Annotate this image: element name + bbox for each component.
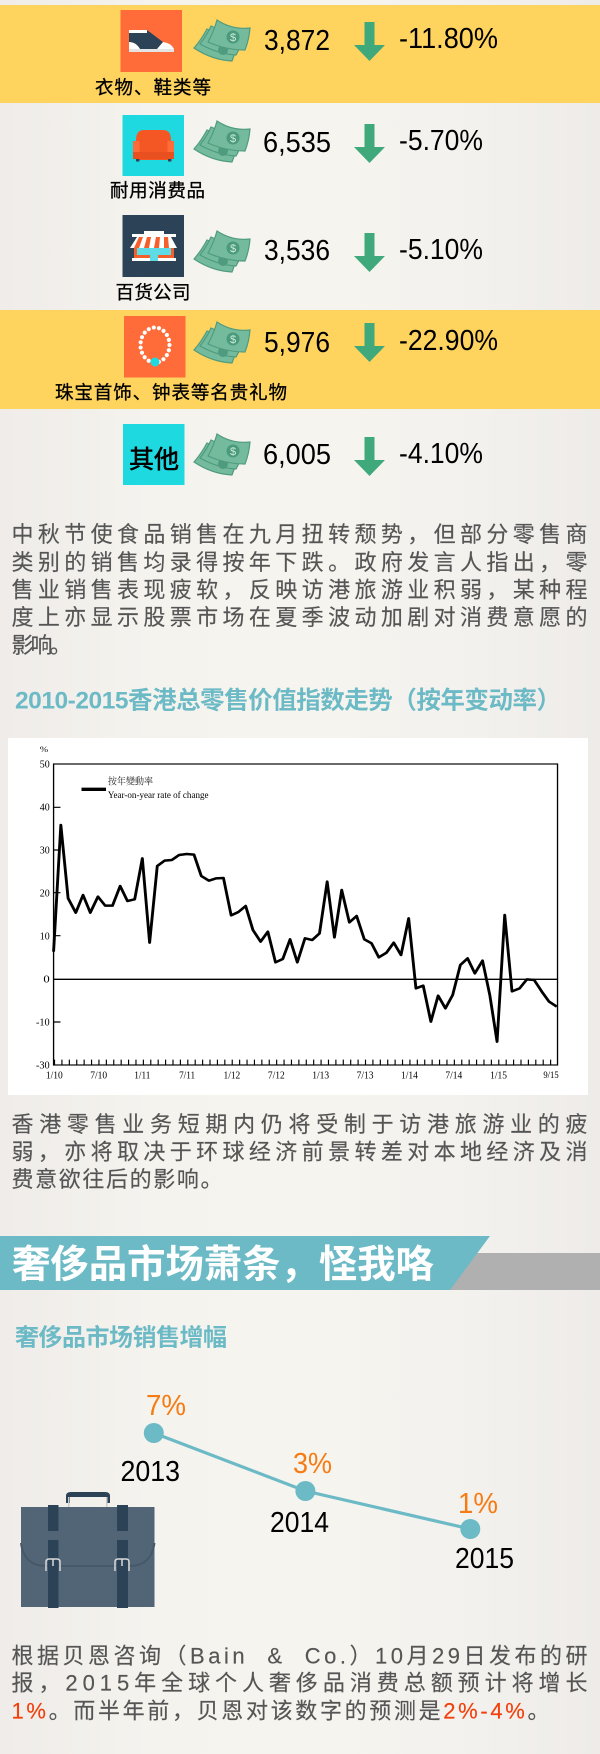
line chart: retail sales index year-on-year change: 7/10 — [90, 1068, 107, 1081]
yellow band — [0, 5, 600, 103]
value: 6,535 — [263, 127, 331, 159]
yellow band — [0, 310, 600, 409]
paragraph: retail commentary — [12, 522, 588, 658]
line chart: luxury market growth — [120, 1390, 514, 1575]
paragraph: retail commentary: 售业销售表现疲软，反映访港旅游业积弱，某种程 — [12, 578, 588, 602]
line chart: luxury market growth: 7% — [146, 1390, 186, 1422]
axis labels: 50 — [40, 757, 50, 770]
label: 珠宝首饰、钟表等名贵礼物 — [55, 382, 287, 403]
line chart: retail sales index year-on-year change: 1/10 — [46, 1068, 63, 1081]
row: clothing and footwear — [0, 5, 600, 103]
icon: money — [194, 20, 250, 61]
line chart: retail sales index year-on-year change: 7/14 — [445, 1068, 462, 1081]
paragraph: Bain forecast: 根据贝恩咨询（Bain & Co.）10月29日发布的研 — [12, 1644, 588, 1668]
paragraph: retail commentary: 类别的销售均录得按年下跌。政府发言人指出，零 — [12, 550, 588, 575]
label: 耐用消费品 — [110, 180, 205, 201]
axis labels: -10 — [36, 1015, 50, 1028]
paragraph: retail outlook — [12, 1112, 588, 1192]
icon: down arrow — [354, 437, 385, 476]
axis labels: 30 — [40, 843, 50, 856]
row: department stores — [116, 215, 483, 303]
axis labels: 10 — [40, 929, 50, 942]
icon: necklace — [124, 316, 186, 378]
axis labels — [36, 745, 50, 1071]
label: 百货公司 — [116, 282, 190, 303]
paragraph: Bain forecast: 报，2015年全球个人奢侈品消费总额预计将增长 — [12, 1670, 588, 1696]
axis labels: 40 — [40, 800, 50, 813]
row: others — [123, 424, 483, 485]
axis labels: 0 — [43, 972, 50, 985]
value: 5,976 — [264, 327, 330, 359]
paragraph: retail outlook: 香港零售业务短期内仍将受制于访港旅游业的疲 — [12, 1112, 588, 1137]
axis labels: % — [40, 745, 48, 755]
paragraph: retail outlook: 费意欲往后的影响。 — [12, 1167, 222, 1192]
row: jewellery and watches — [0, 310, 600, 409]
icon: down arrow — [354, 22, 385, 61]
legend — [82, 775, 209, 801]
axis labels: 20 — [40, 886, 50, 899]
line chart: luxury market growth: 2015 — [455, 1543, 514, 1575]
legend: Year-on-year rate of change — [108, 791, 209, 801]
icon: briefcase — [21, 1492, 154, 1608]
paragraph: retail commentary: 影响。 — [12, 633, 72, 658]
icon: down arrow — [354, 124, 385, 163]
line chart: luxury market growth: 3% — [293, 1448, 332, 1480]
icon: money — [194, 434, 250, 475]
line chart: retail sales index year-on-year change: 7/13 — [357, 1068, 374, 1081]
line chart: luxury market growth: 1% — [458, 1488, 498, 1520]
line chart: retail sales index year-on-year change — [8, 738, 588, 1095]
value: 6,005 — [263, 439, 331, 471]
line chart: retail sales index year-on-year change: 1/12 — [223, 1068, 240, 1081]
icon: down arrow — [354, 233, 385, 272]
icon: money — [194, 121, 250, 162]
paragraph: retail commentary: 中秋节使食品销售在九月扭转颓势，但部分零售商 — [12, 522, 588, 547]
icon: others tile: 其他 — [129, 446, 179, 474]
icon: sneaker — [120, 10, 182, 72]
paragraph: Bain forecast: 1%。而半年前，贝恩对该数字的预测是2%-4%。 — [12, 1698, 550, 1724]
icon: sofa — [122, 115, 184, 176]
icon: money: $ — [230, 334, 236, 346]
change: -4.10% — [399, 438, 483, 470]
paragraph: Bain forecast — [12, 1644, 588, 1724]
row: durable goods — [110, 115, 483, 201]
line chart: retail sales index year-on-year change: 7/11 — [179, 1068, 195, 1081]
label: 衣物、鞋类等 — [95, 77, 211, 98]
icon: money: $ — [230, 133, 236, 145]
legend: 按年變動率 — [108, 775, 154, 787]
line chart: retail sales index year-on-year change: 1/14 — [401, 1068, 418, 1081]
line chart: retail sales index year-on-year change: 9/15 — [543, 1071, 559, 1081]
change: -11.80% — [399, 23, 498, 55]
line chart: retail sales index year-on-year change: 1/11 — [134, 1068, 150, 1081]
banner: luxury section header: 奢侈品市场萧条，怪我咯 — [12, 1244, 434, 1286]
line chart: luxury market growth: 2013 — [120, 1456, 180, 1488]
paragraph: retail outlook: 弱，亦将取决于环球经济前景转差对本地经济及消 — [12, 1140, 588, 1164]
line chart: retail sales index year-on-year change: 1/15 — [490, 1068, 507, 1081]
heading: luxury sales growth: 奢侈品市场销售增幅 — [15, 1324, 227, 1352]
value: 3,536 — [264, 235, 330, 267]
line chart: luxury market growth: 2014 — [270, 1507, 329, 1539]
change: -5.10% — [399, 234, 483, 266]
heading: retail index chart title: 2010-2015香港总零售价值指数走势（按年变动率） — [15, 686, 561, 714]
value: 3,872 — [264, 25, 330, 57]
change: -22.90% — [399, 325, 498, 357]
icon: down arrow — [354, 323, 385, 362]
icon: money: $ — [230, 32, 236, 44]
icon: money: $ — [230, 243, 236, 255]
banner: luxury section header — [0, 1236, 600, 1290]
icon: money — [194, 231, 250, 272]
icon: money: $ — [230, 446, 236, 458]
icon: storefront — [122, 215, 184, 277]
line chart: retail sales index year-on-year change: 7/12 — [268, 1068, 285, 1081]
paragraph: retail commentary: 度上亦显示股票市场在夏季波动加剧对消费意愿的 — [12, 605, 588, 630]
line chart: retail sales index year-on-year change: 1/13 — [312, 1068, 329, 1081]
axis labels: -30 — [36, 1058, 50, 1071]
icon: others tile — [123, 424, 184, 485]
change: -5.70% — [399, 125, 483, 157]
icon: money — [194, 322, 250, 363]
